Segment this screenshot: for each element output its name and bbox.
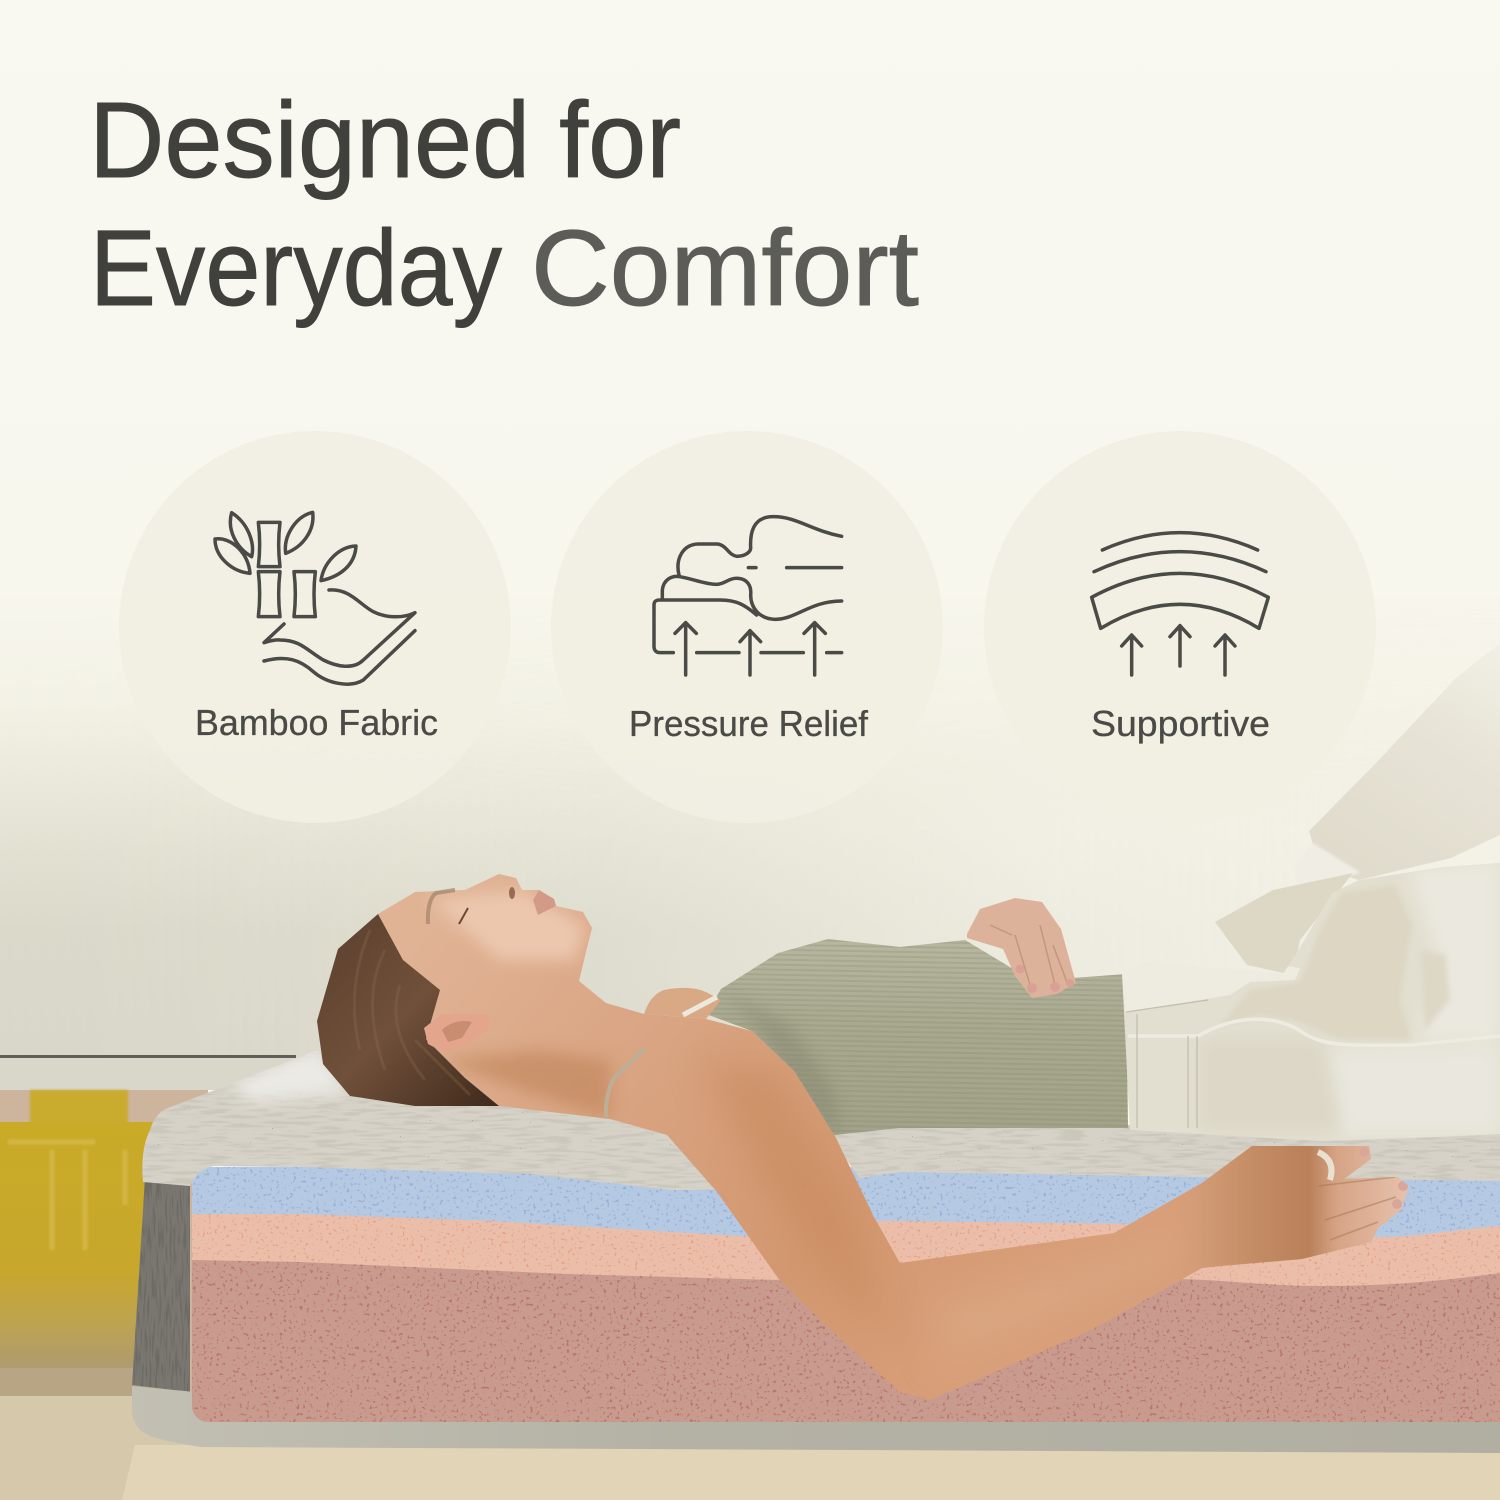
icon: bamboo and fabric bbox=[215, 512, 415, 684]
forearm highlight bbox=[966, 1315, 990, 1328]
tank strap bbox=[683, 997, 717, 1015]
woman lying on the mattress bbox=[317, 643, 1500, 1410]
floor and rug in the room bbox=[0, 1055, 1500, 1500]
feature: supportive bbox=[984, 431, 1376, 823]
lips bbox=[533, 890, 556, 915]
icon: pressure relief bbox=[654, 517, 842, 675]
finger nails bbox=[1359, 1147, 1408, 1209]
eyebrow bbox=[428, 890, 455, 924]
icon: supportive arc with arrows bbox=[1092, 533, 1268, 675]
foam layers bbox=[192, 1167, 1500, 1422]
mattress top cover bbox=[130, 1040, 1500, 1190]
label: pressure relief: Pressure Relief bbox=[629, 703, 869, 744]
neck shading bbox=[440, 1050, 610, 1118]
resting hand bbox=[967, 898, 1076, 998]
mattress side panel bbox=[132, 1178, 190, 1392]
finger gaps bbox=[1318, 1177, 1396, 1240]
mattress cross-section bbox=[130, 1040, 1500, 1453]
trouser side seams bbox=[1126, 1000, 1208, 1128]
label: supportive: Supportive bbox=[1091, 703, 1270, 744]
hand bbox=[1182, 1146, 1409, 1272]
title: Everyday bbox=[90, 207, 502, 328]
raised leg, behind bbox=[1215, 843, 1360, 975]
feature: bamboo fabric bbox=[119, 431, 511, 823]
mattress bottom band bbox=[132, 1386, 1500, 1453]
arm shading bbox=[709, 1060, 868, 1294]
nostril bbox=[509, 887, 515, 899]
face highlight bbox=[430, 890, 585, 960]
ear bbox=[424, 1014, 490, 1053]
tank top bbox=[700, 935, 1135, 1140]
title: Designed for bbox=[89, 79, 681, 200]
closed eye bbox=[459, 908, 468, 924]
trouser pocket seam bbox=[1128, 1019, 1500, 1045]
bra strap bbox=[606, 1049, 644, 1117]
title bbox=[89, 79, 919, 328]
background wall bbox=[0, 657, 1500, 1060]
raised leg, upper bbox=[1309, 643, 1500, 880]
foam: peach layer bbox=[192, 1214, 1500, 1286]
label: bamboo fabric: Bamboo Fabric bbox=[195, 702, 438, 743]
feature: pressure relief bbox=[551, 431, 943, 823]
ring bbox=[1318, 1152, 1332, 1180]
trousers bbox=[1120, 860, 1500, 1145]
title: Comfort bbox=[531, 207, 919, 328]
face, neck and arm bbox=[370, 860, 1420, 1410]
chest bbox=[644, 988, 721, 1019]
foam: blue layer bbox=[192, 1167, 1500, 1239]
hair bbox=[317, 914, 499, 1106]
